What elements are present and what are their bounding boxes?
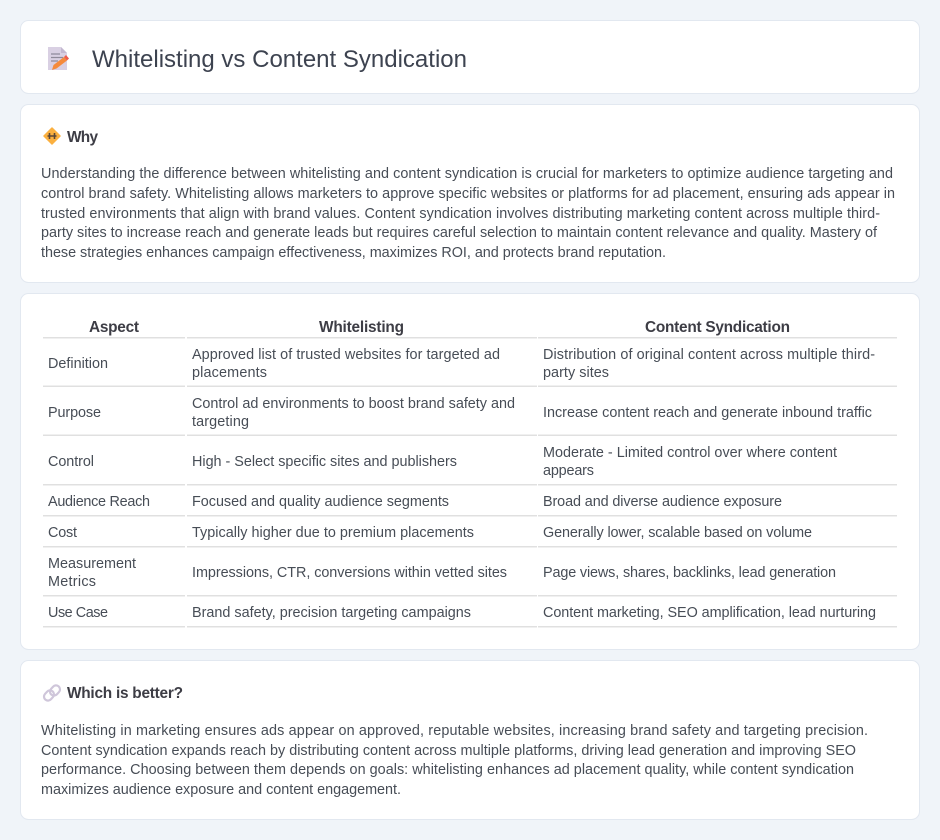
text block: why paragraph: trusted environments that align with brand values. Content syndication involves distributing marketing content across multiple third- bbox=[41, 206, 880, 222]
row: control bbox=[48, 445, 837, 479]
row: use case: Use Case bbox=[48, 605, 108, 621]
text block: why paragraph: Understanding the difference between whitelisting and content syndication is crucial for marketers to optimize audience targeting and bbox=[41, 166, 893, 182]
row: purpose: Control ad environments to boost brand safety and bbox=[192, 396, 515, 412]
row: purpose bbox=[48, 396, 872, 430]
row: purpose: Purpose bbox=[48, 405, 101, 421]
icon: document with pencil bbox=[48, 47, 69, 70]
row: definition: placements bbox=[192, 365, 267, 381]
table rule lines bbox=[43, 337, 897, 628]
row: use case: Brand safety, precision targeting campaigns bbox=[192, 605, 471, 621]
row: cost: Generally lower, scalable based on volume bbox=[543, 525, 812, 541]
row: definition: Approved list of trusted websites for targeted ad bbox=[192, 347, 500, 363]
row: audience reach: Broad and diverse audience exposure bbox=[543, 494, 782, 510]
row: measurement metrics: Impressions, CTR, conversions within vetted sites bbox=[192, 565, 507, 581]
heading: which is better: Which is better? bbox=[67, 685, 183, 702]
row: audience reach: Focused and quality audience segments bbox=[192, 494, 449, 510]
row: audience reach bbox=[48, 494, 782, 510]
row: cost: Cost bbox=[48, 525, 77, 541]
row: audience reach: Audience Reach bbox=[48, 494, 150, 510]
heading: why: Why bbox=[67, 129, 98, 146]
text block: which is better paragraph: Whitelisting in marketing ensures ads appear on approved, reputable websites, increasing brand safety and targeting precision. bbox=[41, 723, 868, 739]
text block: why paragraph: control brand safety. Whitelisting allows marketers to approve specific websites or platforms for ad placement, ensuring ads appear in bbox=[41, 186, 895, 202]
text block: why paragraph bbox=[41, 166, 895, 261]
text block: why paragraph: these strategies enhances campaign effectiveness, maximizes ROI, and protects brand reputation. bbox=[41, 245, 666, 261]
row: measurement metrics: Page views, shares, backlinks, lead generation bbox=[543, 565, 836, 581]
row: control: High - Select specific sites and publishers bbox=[192, 454, 457, 470]
row: definition: Definition bbox=[48, 356, 108, 372]
panel: which is better bbox=[20, 660, 920, 820]
row: purpose: targeting bbox=[192, 414, 249, 430]
row: control: Moderate - Limited control over where content bbox=[543, 445, 837, 461]
text block: which is better paragraph: Content syndication expands reach by distributing content across multiple platforms, driving lead generation and improving SEO bbox=[41, 743, 856, 759]
table header row: Content Syndication bbox=[645, 319, 790, 336]
row: use case: Content marketing, SEO amplification, lead nurturing bbox=[543, 605, 876, 621]
row: definition bbox=[48, 347, 875, 381]
row: measurement metrics: Metrics bbox=[48, 574, 96, 590]
row: cost: Typically higher due to premium placements bbox=[192, 525, 474, 541]
text block: which is better paragraph: performance. Choosing between them depends on goals: whitelisting enhances ad placement quality, while content syndication bbox=[41, 762, 854, 778]
row: cost bbox=[48, 525, 812, 541]
table header row bbox=[89, 319, 790, 336]
icon: warning diamond bbox=[44, 128, 60, 144]
row: measurement metrics: Measurement bbox=[48, 556, 136, 572]
text block: which is better paragraph bbox=[41, 723, 868, 798]
panel: header bbox=[20, 20, 920, 94]
table header row: Aspect bbox=[89, 319, 139, 336]
row: control: Control bbox=[48, 454, 94, 470]
panel: why bbox=[20, 104, 920, 282]
text block: which is better paragraph: maximizes audience exposure and content engagement. bbox=[41, 782, 401, 798]
panel: comparison table bbox=[20, 294, 920, 650]
row: definition: party sites bbox=[543, 365, 609, 381]
icon: link bbox=[42, 684, 62, 702]
text block: why paragraph: party sites to increase reach and generate leads but requires careful selection to maintain content relevance and quality. Mastery of bbox=[41, 225, 878, 241]
row: use case bbox=[48, 605, 876, 621]
row: control: appears bbox=[543, 463, 594, 479]
title: Whitelisting vs Content Syndication bbox=[92, 46, 467, 73]
row: measurement metrics bbox=[48, 556, 836, 590]
row: definition: Distribution of original content across multiple third- bbox=[543, 347, 875, 363]
table header row: Whitelisting bbox=[319, 319, 404, 336]
row: purpose: Increase content reach and generate inbound traffic bbox=[543, 405, 872, 421]
